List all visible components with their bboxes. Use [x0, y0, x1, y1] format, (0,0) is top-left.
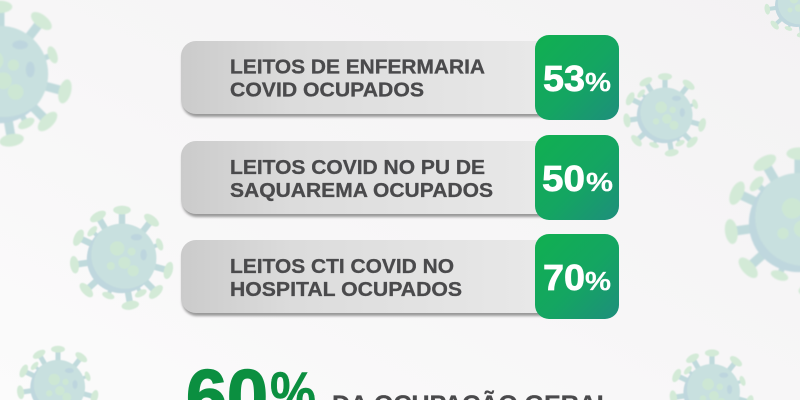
label: enfermaria: LEITOS DE ENFERMARIA — [230, 56, 485, 78]
panel: leitos CTI — [181, 234, 619, 319]
icon: virus bottom left — [16, 346, 100, 400]
icon: virus top left — [0, 1, 74, 148]
panel: leitos de enfermaria — [181, 35, 619, 120]
icon: virus upper right — [623, 73, 707, 158]
icon: virus right large — [723, 147, 800, 298]
value box: 50%: % — [586, 167, 613, 197]
callout: 60% da ocupação geral — [186, 355, 612, 400]
value box: 50%: 50 — [542, 158, 585, 199]
icon: virus middle left — [69, 206, 175, 311]
value box: 53%: 53 — [543, 58, 585, 99]
value box: 50% — [535, 135, 619, 220]
label: PU de Saquarema: LEITOS COVID NO PU DE — [230, 157, 485, 179]
label: enfermaria: COVID OCUPADOS — [230, 80, 424, 102]
icon: virus bottom right — [669, 349, 755, 400]
value box: 70%: % — [585, 266, 611, 296]
panel: leitos PU de Saquarema — [181, 135, 619, 220]
value box: 53% — [535, 35, 619, 120]
value box: 70% — [535, 234, 619, 319]
label: PU de Saquarema: SAQUAREMA OCUPADOS — [230, 180, 493, 202]
label: CTI: LEITOS CTI COVID NO — [230, 256, 454, 278]
icon: virus top right corner — [764, 0, 800, 38]
label: CTI: HOSPITAL OCUPADOS — [230, 279, 462, 301]
value box: 70%: 70 — [543, 257, 585, 298]
value box: 53%: % — [585, 67, 611, 97]
